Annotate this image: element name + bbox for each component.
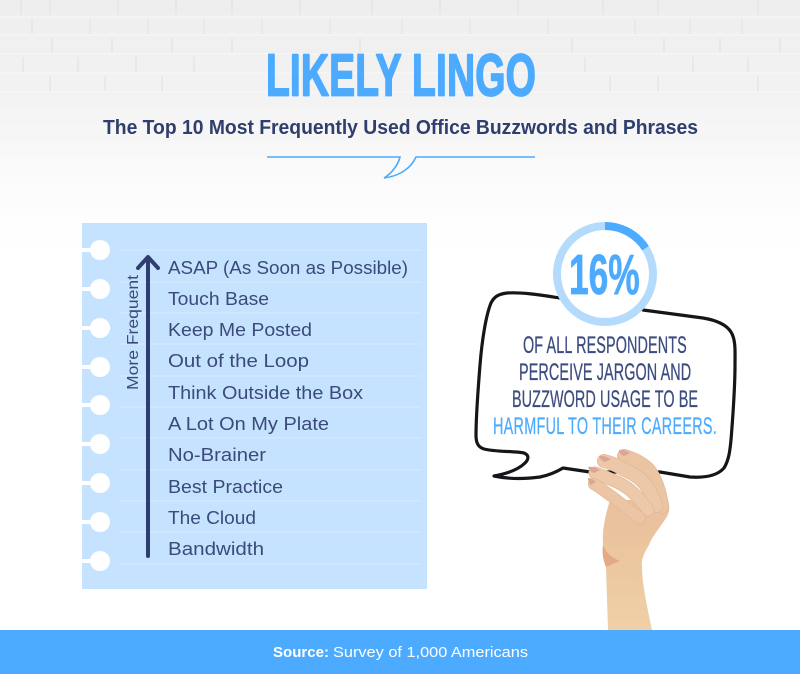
ring finger (595, 473, 648, 510)
ranked buzzword list: The Cloud (168, 508, 256, 528)
ranked buzzword list: Out of the Loop (168, 351, 309, 371)
ruled lines (120, 250, 420, 564)
ranked buzzword list: A Lot On My Plate (168, 414, 329, 434)
middle finger (604, 461, 656, 506)
ring highlight segment (605, 226, 646, 248)
ranked buzzword list: No-Brainer (168, 445, 266, 465)
panel: notebook list (82, 223, 427, 589)
bubble text: PERCEIVE JARGON AND (519, 359, 691, 386)
ranked buzzword list: ASAP (As Soon as Possible) (168, 258, 408, 278)
binder holes (82, 240, 110, 571)
ranked buzzword list: Think Outside the Box (168, 383, 363, 403)
bubble text (493, 332, 717, 440)
notebook page (82, 223, 427, 589)
speech bubble (476, 293, 735, 478)
background: white brick wall (0, 0, 800, 250)
source note: Survey of 1,000 Americans (333, 644, 528, 661)
speech tail divider (267, 157, 535, 178)
little finger (594, 484, 640, 518)
subtitle: The Top 10 Most Frequently Used Office Buzzwords and Phrases (103, 117, 698, 139)
axis label: More Frequent (125, 274, 142, 390)
stat value: 16% (569, 244, 640, 307)
bubble text: HARMFUL TO THEIR CAREERS. (493, 413, 717, 440)
wrist and palm (603, 500, 669, 630)
fingernails (588, 450, 630, 485)
arrow: more frequent (138, 257, 158, 556)
stat ring: 16% (557, 226, 653, 322)
source note: Source: (273, 644, 329, 661)
ranked buzzword list: Bandwidth (168, 539, 264, 559)
ranked buzzword list (168, 258, 408, 559)
bubble text: OF ALL RESPONDENTS (523, 332, 687, 359)
ranked buzzword list: Touch Base (168, 289, 269, 309)
icon: hand holding bubble (588, 450, 669, 630)
bubble text: BUZZWORD USAGE TO BE (512, 386, 698, 413)
palm shading (603, 545, 620, 567)
index finger (624, 456, 662, 507)
title: LIKELY LINGO (266, 42, 536, 109)
ranked buzzword list: Best Practice (168, 477, 283, 497)
footer bar (0, 630, 800, 674)
ranked buzzword list: Keep Me Posted (168, 320, 312, 340)
